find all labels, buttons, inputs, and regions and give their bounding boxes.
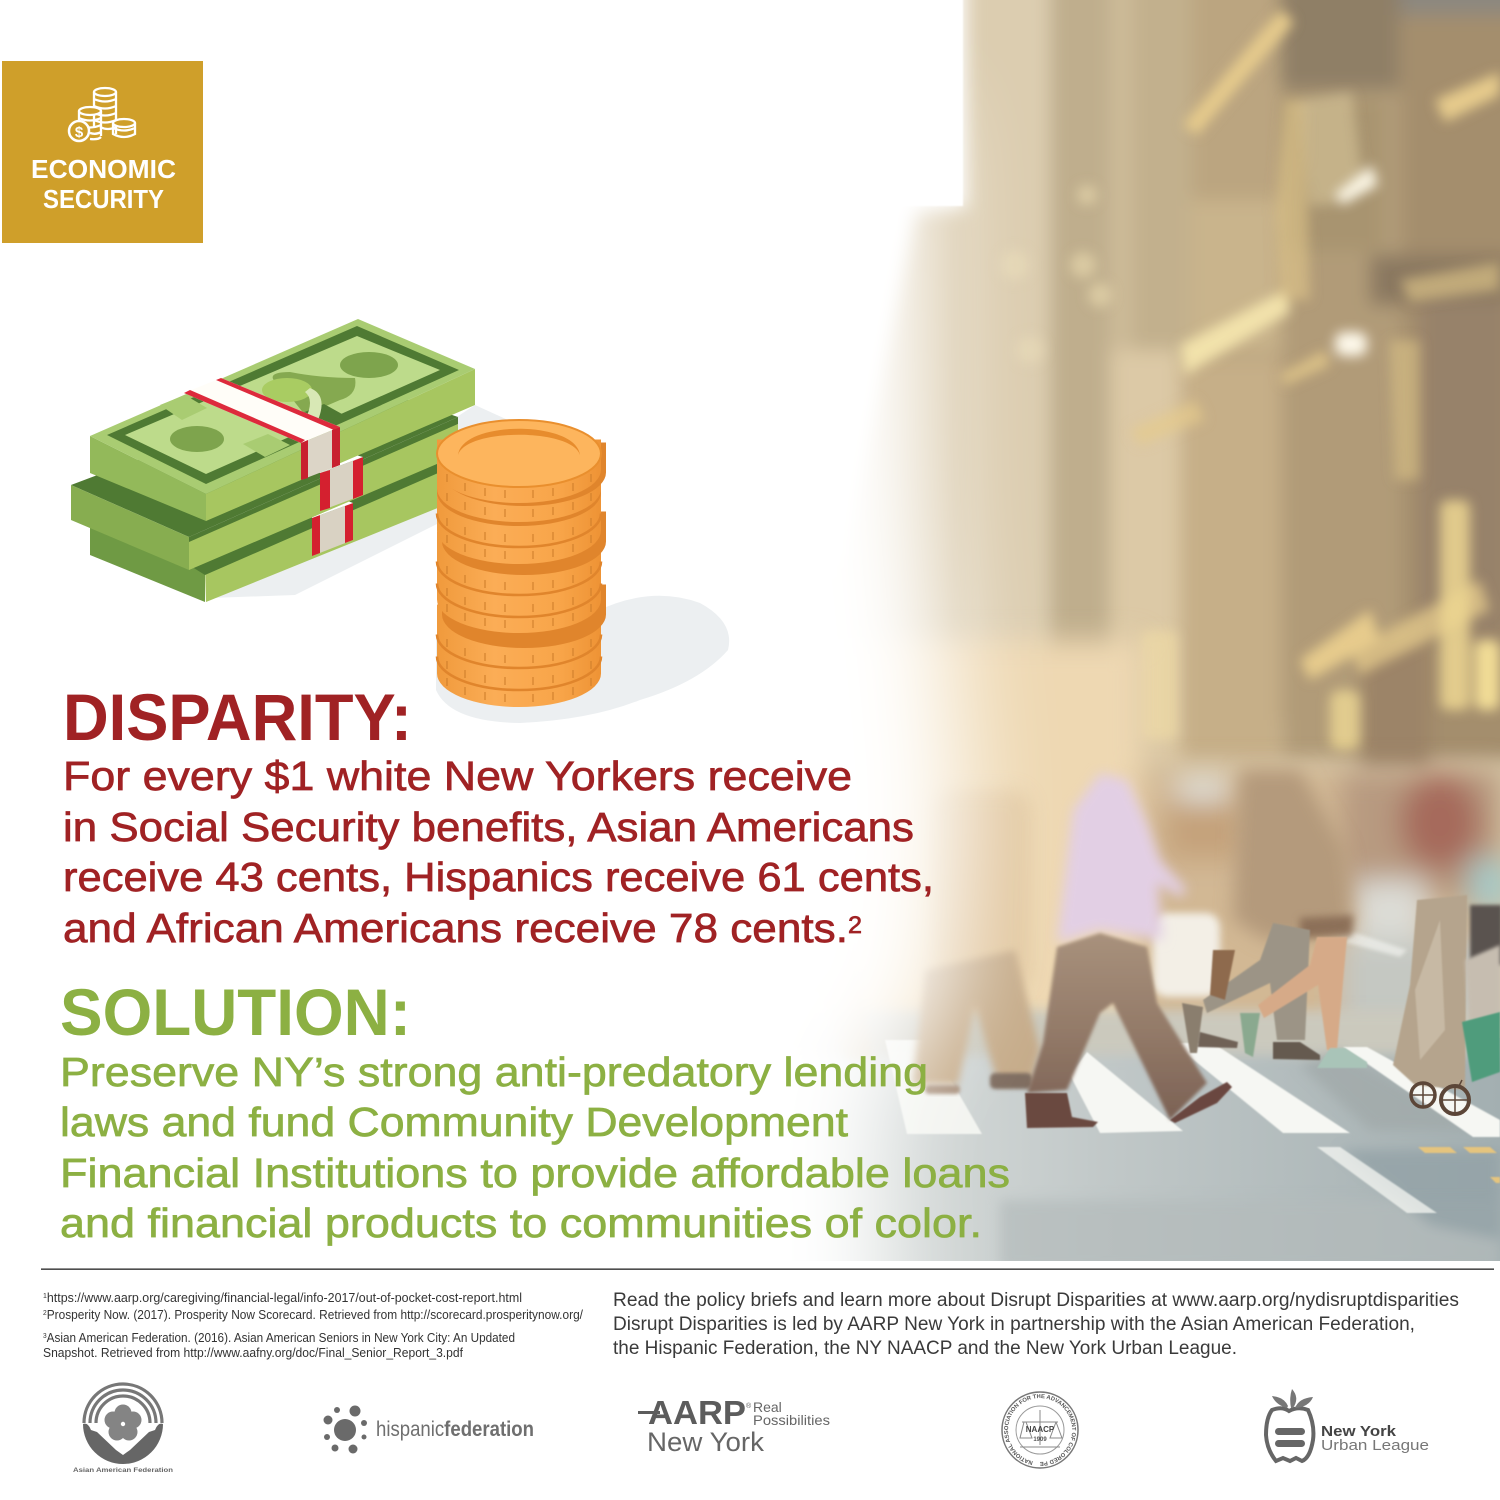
- logo: New York Urban League: New York: [1321, 1423, 1397, 1440]
- background photo: blurred city street with pedestrians: [844, 0, 1500, 1261]
- middle bundle: [71, 380, 458, 570]
- pedestrian: main figure in lavender shirt: [1025, 773, 1232, 1128]
- illustration: shadows under money and coins: [210, 405, 729, 723]
- logo: AARP New York: [638, 1394, 830, 1457]
- text block: policy brief note: the Hispanic Federation, the NY NAACP and the New York Urban League.: [613, 1338, 1237, 1359]
- crisp white sky above the skyline: [924, 0, 964, 206]
- category badge: economic security: $: [75, 124, 84, 141]
- pedestrian: second figure with long hair and bare legs: [1182, 770, 1367, 1068]
- text block: disparity statement: in Social Security benefits, Asian Americans: [63, 804, 914, 850]
- blurred highlights on building facades: [1000, 10, 1500, 750]
- logo: New York Urban League: [1266, 1389, 1429, 1461]
- footnotes: [43, 1291, 584, 1360]
- blurred buildings: [873, 0, 1500, 1038]
- logo: AARP New York: New York: [647, 1427, 764, 1457]
- footnotes: 3: [43, 1333, 47, 1340]
- logo: Hispanic Federation: [324, 1406, 534, 1454]
- logo: NAACP seal: [1001, 1391, 1079, 1469]
- badge label: ECONOMIC: [31, 154, 176, 184]
- crosswalk stripes: [885, 932, 1500, 1213]
- text block: disparity statement: receive 43 cents, Hispanics receive 61 cents,: [63, 854, 934, 900]
- logo: NAACP seal: NATIONAL ASSOCIATION FOR THE ADVANCEMENT OF COLORED PEOPLE: [1004, 1394, 1076, 1466]
- pedestrian: far left, faded: [740, 945, 872, 1060]
- icon: stacks of coins: [69, 88, 135, 141]
- footnotes: https://www.aarp.org/caregiving/financial-legal/info-2017/out-of-pocket-cost-report.html: [47, 1291, 522, 1305]
- text block: disparity statement: 2: [848, 912, 862, 939]
- illustration: stack of cash with bands: [71, 319, 475, 602]
- divider rule: [41, 1268, 1494, 1270]
- heading: solution: SOLUTION:: [60, 975, 411, 1049]
- bottom bundle: [90, 450, 458, 602]
- top coin face: [437, 420, 601, 487]
- footnotes: Asian American Federation. (2016). Asian American Seniors in New York City: An Updated: [47, 1331, 515, 1345]
- top bundle: [90, 319, 475, 521]
- text block: policy brief note: [613, 1290, 1459, 1359]
- logo: AARP New York: ®: [746, 1402, 752, 1410]
- road surface: [844, 1006, 1500, 1261]
- footnotes: 1: [43, 1293, 47, 1300]
- text block: solution statement: and financial products to communities of color.: [60, 1200, 982, 1246]
- pedestrian: left figure: [912, 790, 1040, 1094]
- shopping cart and bag: [1393, 895, 1500, 1114]
- text block: disparity statement: For every $1 white New Yorkers receive: [63, 753, 852, 799]
- white shopping bag: [1153, 913, 1220, 997]
- text block: disparity statement: [63, 753, 934, 951]
- logo: Asian American Federation: [73, 1384, 173, 1474]
- footnotes: Snapshot. Retrieved from http://www.aafny.org/doc/Final_Senior_Report_3.pdf: [43, 1346, 463, 1360]
- text block: policy brief note: Disrupt Disparities is led by AARP New York in partnership with the Asian American Federation,: [613, 1314, 1415, 1335]
- footnotes: 2: [43, 1310, 47, 1317]
- category badge: economic security: SECURITY: [43, 184, 164, 214]
- text block: solution statement: [60, 1049, 1010, 1246]
- logo: AARP New York: Real: [753, 1399, 782, 1415]
- logo: Hispanic Federation: hispanicfederation: [376, 1418, 534, 1441]
- top band: [184, 378, 340, 480]
- logo: Asian American Federation: Asian American Federation: [73, 1467, 173, 1474]
- text block: solution statement: Financial Institutions to provide affordable loans: [60, 1150, 1010, 1196]
- category badge: economic security: [2, 61, 203, 243]
- soft white fade over left of photo: [728, 130, 1024, 1261]
- illustration: stack of gold coins: [437, 420, 606, 707]
- street level warm haze and blurred background street: [932, 628, 1500, 1014]
- heading: disparity: DISPARITY:: [63, 680, 412, 754]
- bottom band: [310, 500, 353, 556]
- logo: AARP New York: AARP: [648, 1394, 746, 1431]
- logo: NAACP seal: 1909: [1033, 1437, 1047, 1443]
- logo: New York Urban League: Urban League: [1321, 1437, 1429, 1454]
- text block: solution statement: Preserve NY’s strong anti-predatory lending: [60, 1049, 928, 1095]
- middle band: [316, 454, 363, 511]
- logo: NAACP seal: NAACP: [1026, 1425, 1055, 1434]
- text block: disparity statement: and African Americans receive 78 cents.: [63, 905, 848, 951]
- logo: AARP New York: Possibilities: [753, 1412, 830, 1428]
- footnotes: Prosperity Now. (2017). Prosperity Now Scorecard. Retrieved from http://scorecard.prosperitynow.org/: [47, 1308, 584, 1322]
- text block: policy brief note: Read the policy briefs and learn more about Disrupt Disparities at www.aarp.org/nydisruptdisparities: [613, 1290, 1459, 1311]
- text block: solution statement: laws and fund Community Development: [60, 1099, 849, 1145]
